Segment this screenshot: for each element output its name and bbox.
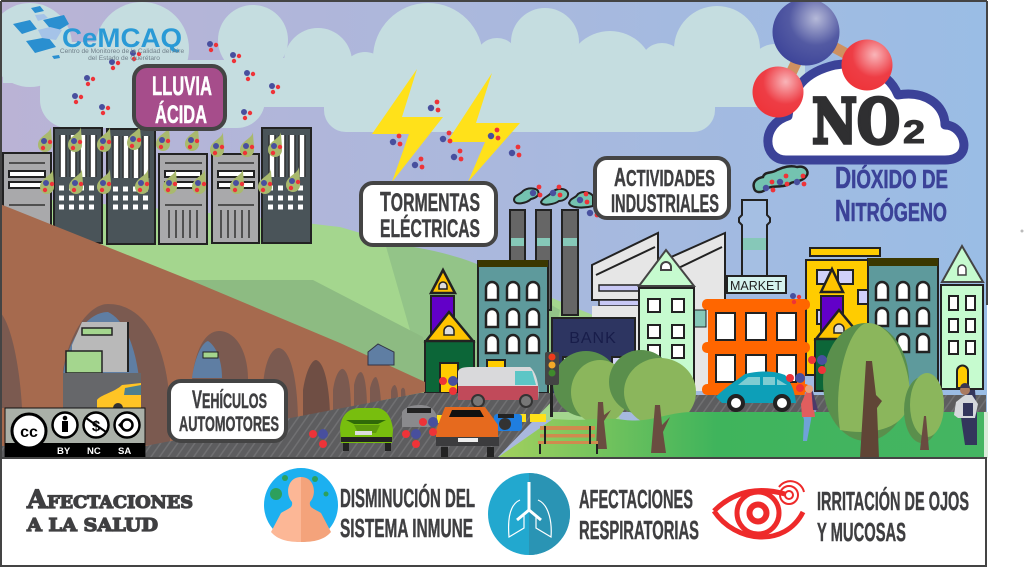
man: [954, 383, 978, 445]
arch 1: [0, 312, 22, 408]
text: disminucion: DISMINUCIÓN DEL: [340, 483, 475, 513]
sa icon: [114, 412, 140, 438]
tall chimney: [739, 200, 770, 278]
license labels: BY: [57, 446, 71, 457]
main road: [0, 393, 560, 458]
hills: [0, 195, 620, 420]
icon: lungs: [488, 473, 570, 555]
market building: [702, 276, 810, 395]
arch 9: [391, 385, 398, 403]
gray building 4: [159, 154, 207, 244]
cloud: [768, 64, 964, 160]
license labels: [57, 446, 131, 457]
factory chimneys and smoke: [510, 185, 599, 315]
market sign: MARKET: [730, 279, 782, 293]
NO2 name: NITRÓGENO: [835, 193, 947, 228]
icon: immune body: [264, 468, 338, 542]
bank: BANK: [569, 330, 617, 347]
arch 2: [63, 304, 170, 445]
dark building 6: [262, 128, 311, 243]
mint house: [639, 250, 694, 393]
CeMCAQ logo: [13, 6, 184, 62]
icon: irritated eye: [714, 481, 804, 537]
mint house right: [941, 246, 983, 389]
label: actividades industriales: ACTIVIDADES: [614, 162, 715, 192]
acid rain drops: [38, 125, 300, 194]
tree middle canopy: [609, 350, 696, 426]
gray car: [402, 405, 437, 427]
gray building 5: [212, 154, 259, 243]
tall chimney and smoke: [739, 166, 808, 278]
arch 2 opening: [63, 312, 141, 408]
panel heading: A LA SALUD: [26, 515, 158, 536]
arch 6: [333, 369, 351, 420]
arch 3: [192, 331, 248, 380]
license labels: SA: [118, 446, 131, 457]
text: mucosas: Y MUCOSAS: [817, 517, 906, 547]
nc icon: $: [92, 418, 101, 435]
license labels: NC: [87, 446, 101, 457]
label: lluvia acida: [134, 66, 225, 129]
label: vehiculos automotores: AUTOMOTORES: [179, 413, 279, 436]
text: afectaciones: AFECTACIONES: [579, 484, 693, 514]
smoke: [514, 188, 593, 208]
panel: health effects: [1, 458, 986, 566]
logo wordmark: CeMCAQ: [62, 23, 182, 53]
logo subtitle line 2: del Estado de Querétaro: [88, 55, 160, 62]
label: vehiculos automotores: [169, 381, 286, 441]
molecules in the cloud: [72, 41, 280, 120]
chimneys: [510, 210, 578, 315]
tall chimney smoke: [754, 166, 808, 192]
creative commons badge: [5, 408, 145, 457]
label: actividades industriales: [595, 158, 729, 218]
tree left canopy: [553, 351, 629, 424]
woman: [801, 385, 818, 441]
dark building 3: [107, 129, 155, 244]
text: sistema inmune: SISTEMA INMUNE: [340, 513, 473, 543]
by icon: [52, 412, 78, 438]
logo subtitle: Centro de Monitoreo de la Calidad del Aire: [60, 48, 184, 55]
arch 5: [303, 360, 330, 425]
teal car: [716, 371, 796, 410]
logo squares: [13, 6, 69, 59]
label: tormentas electricas: TORMENTAS: [380, 186, 480, 217]
arch 10: [401, 388, 406, 401]
label: vehiculos automotores: VEHÍCULOS: [192, 386, 267, 414]
frame lines: [1, 1, 987, 458]
orange pickup: [436, 407, 499, 457]
NO2 name: [835, 160, 948, 228]
tree trunks: [596, 402, 670, 453]
NO2 formula: NO: [812, 85, 900, 158]
chimney bands: [511, 238, 577, 246]
label: tormentas electricas: [361, 183, 496, 245]
traffic light: [545, 352, 559, 417]
road molecules: [309, 293, 827, 448]
teal building: [478, 260, 548, 393]
large tree: [823, 323, 910, 458]
cc icon: cc: [20, 424, 38, 441]
church left: [425, 270, 474, 393]
gray building through arch: [72, 322, 128, 372]
blue car: [494, 414, 522, 431]
text: respiratorias: RESPIRATORIAS: [579, 515, 699, 545]
label: actividades industriales: INDUSTRIALES: [611, 190, 719, 218]
white factory: [592, 233, 725, 391]
arch 7: [354, 372, 367, 412]
clouds: [0, 2, 805, 132]
nitrogen atom: [772, 0, 840, 66]
red van: [458, 367, 539, 407]
panel heading: AFECTACIONES: [26, 485, 193, 514]
sky background: [1, 1, 987, 459]
grass: [497, 412, 985, 458]
church right: [815, 269, 863, 391]
teal building right: [868, 258, 938, 389]
bank: [552, 318, 635, 396]
NO2 name: DIÓXIDO DE: [835, 160, 948, 195]
label: tormentas electricas: ELÉCTRICAS: [380, 214, 480, 243]
gray building 1: [3, 153, 51, 233]
oxygen atom right: [842, 40, 892, 90]
dark building 2: [54, 128, 102, 243]
buildings behind the acid rain: [3, 128, 311, 244]
right road: [553, 395, 986, 412]
small house: [368, 344, 394, 365]
aqueduct: [0, 204, 425, 446]
taxi: [97, 383, 141, 413]
label: lluvia acida: LLUVIA: [152, 71, 212, 101]
panel heading: [26, 485, 193, 536]
subscript 2: 2: [903, 114, 925, 150]
storm molecules: [390, 100, 521, 169]
smoke molecules: [763, 174, 806, 192]
oxygen atom left: [752, 66, 804, 118]
label: lluvia acida: ÁCIDA: [155, 100, 207, 129]
small tree right: [904, 373, 944, 450]
bonds: [782, 32, 867, 92]
bench: [538, 426, 598, 454]
lightning bolts: [372, 69, 520, 182]
arch 4: [263, 348, 298, 425]
green car: [340, 408, 393, 451]
smoke molecules: [530, 185, 599, 217]
orange frame: [708, 300, 805, 395]
arch 8: [370, 377, 381, 408]
yellow building: [806, 248, 880, 375]
stray dot: [1020, 230, 1024, 232]
white strip right: [984, 412, 988, 458]
crosswalk: [437, 414, 546, 423]
NO2 molecule cloud: [752, 0, 964, 160]
